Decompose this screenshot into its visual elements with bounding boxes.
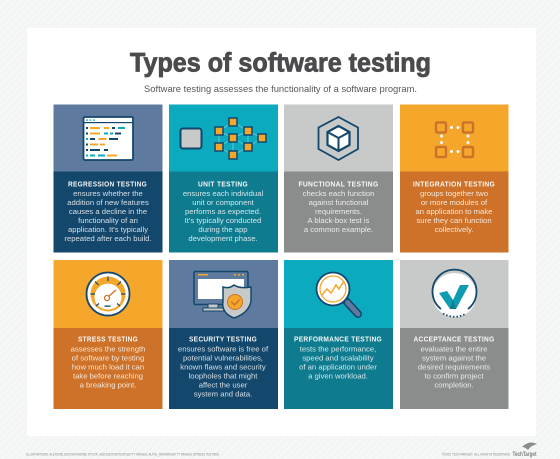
description: take before reaching [73, 371, 143, 380]
heading: UNIT TESTING [198, 179, 248, 188]
panel: performance testing [284, 260, 393, 409]
heading: SECURITY TESTING [189, 334, 257, 344]
icon: check mark badge [432, 270, 477, 317]
description: sure they can function [416, 216, 492, 225]
description: known flaws and security [180, 362, 266, 371]
heading: PERFORMANCE TESTING [294, 334, 382, 344]
title: Types of software testing [130, 48, 431, 78]
icon: cube in hexagon [318, 117, 358, 160]
heading: INTEGRATION TESTING [413, 179, 495, 188]
description: development phase. [188, 234, 258, 243]
icon: monitor and shield [194, 272, 251, 318]
description [71, 344, 145, 389]
icon: connected modules [436, 122, 473, 157]
description: potential vulnerabilities, [183, 354, 263, 362]
icon: speed gauge [86, 272, 130, 316]
footer: illustration credits: ILLUSTRATIONS: ALEXEYBLOGOODF/ADOBE STOCK, SUB:DOCK/ISTOCK/GETTY IMAGES, ALVOL_BROWN/GETTY IMAGES (STRESS TESTING) [26, 452, 219, 456]
description: a given workload. [308, 371, 368, 380]
heading: FUNCTIONAL TESTING [298, 179, 378, 188]
panel: regression testing [54, 104, 162, 252]
description: a breaking point. [80, 380, 136, 389]
description: tests the performance, [300, 344, 376, 354]
panel: stress testing [54, 260, 162, 409]
description: repeated after each build. [64, 234, 152, 243]
description: system and data. [194, 389, 252, 398]
description: unit or component [192, 198, 255, 207]
icon: unit nodes [180, 118, 266, 159]
description: addition of new features [67, 198, 149, 207]
description: system against the [422, 354, 486, 362]
description: evaluates the entire [420, 344, 488, 354]
description: during the app [198, 225, 248, 234]
logo: TechTarget: TechTarget [512, 452, 536, 458]
icon: magnifier with chart [316, 272, 358, 314]
description: to confirm project [425, 371, 484, 380]
description: assesses the strength [71, 344, 145, 354]
footer: copyright: ©2021 TECHTARGET. ALL RIGHTS RESERVED [442, 452, 511, 456]
description [183, 189, 263, 243]
description: of an application under [299, 362, 377, 371]
description: collectively. [435, 225, 473, 234]
description: groups together two [420, 189, 488, 198]
description [418, 344, 490, 389]
heading: REGRESSION TESTING [68, 179, 147, 188]
description [416, 189, 492, 234]
description: It's typically conducted [185, 216, 261, 225]
description: requirements. [315, 207, 362, 216]
description: an application to make [416, 207, 492, 216]
description [178, 344, 269, 398]
description: affect the user [199, 380, 248, 389]
description: desired requirements [418, 362, 490, 371]
description: of software by testing [72, 354, 144, 362]
description: or more modules of [421, 198, 488, 207]
panel: acceptance testing [400, 260, 508, 409]
logo: TechTarget [512, 443, 537, 458]
description: speed and scalability [302, 354, 374, 362]
description: how much load it can [72, 362, 144, 371]
description: application. It's typically [68, 225, 148, 234]
description: performs as expected. [185, 207, 261, 216]
heading: ACCEPTANCE TESTING [414, 334, 494, 344]
description [64, 189, 152, 243]
panel: functional testing [284, 104, 393, 252]
subtitle: Software testing assesses the functionality of a software program. [144, 84, 417, 95]
description [299, 344, 377, 380]
icon: code window [84, 117, 133, 160]
description: ensures software is free of [178, 344, 269, 354]
description: checks each function [303, 189, 374, 198]
panel: integration testing [400, 104, 508, 252]
description: ensures whether the [73, 189, 143, 198]
description: A black-box test is [308, 216, 370, 225]
description: causes a decline in the [69, 207, 147, 216]
description: functionality of an [78, 216, 138, 225]
panel: security testing [169, 260, 278, 409]
description [303, 189, 374, 234]
description: completion. [434, 380, 474, 389]
heading: STRESS TESTING [78, 334, 138, 344]
description: loopholes that might [189, 371, 258, 380]
description: against functional [309, 198, 369, 207]
description: a common example. [304, 225, 373, 234]
panel: unit testing [169, 104, 278, 252]
description: ensures each individual [183, 189, 263, 198]
